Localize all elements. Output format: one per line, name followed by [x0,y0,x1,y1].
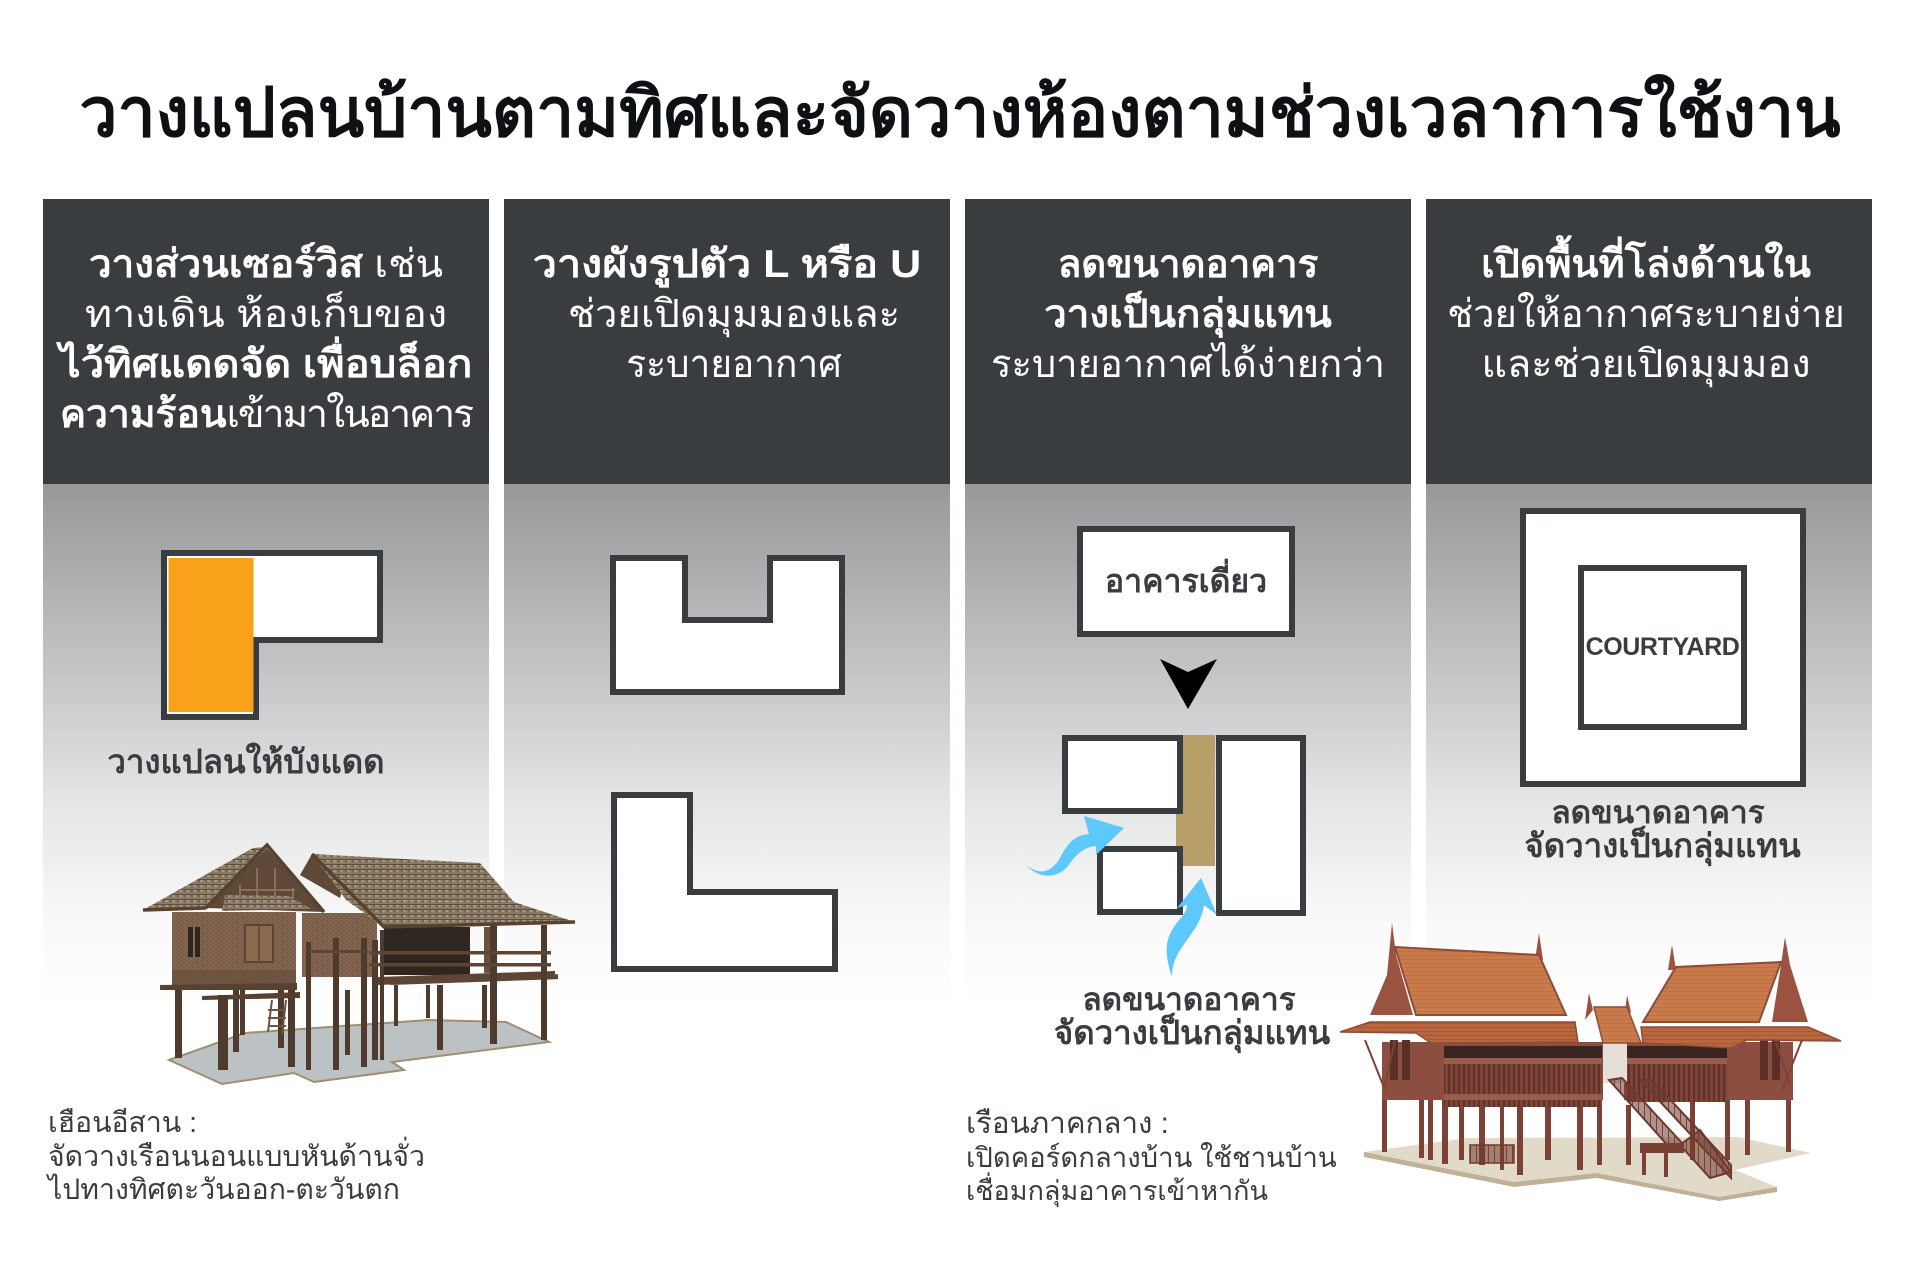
diagram: U-shaped plan [610,555,845,695]
diagram: clustered buildings [1026,735,1306,977]
diagram: courtyard plan [1520,508,1806,787]
panel background [504,484,950,1049]
heading: L or U plan: วางผังรูปตัว L หรือ U [533,243,921,286]
diagram: L-shaped plan [611,792,838,972]
note: Isan house [46,1107,425,1206]
panel: open inner courtyard [1426,199,1872,908]
heading: reduce building size: ลดขนาดอาคาร [1058,243,1318,286]
diagram: sun-shading plan [161,550,383,720]
heading: open inner courtyard: ช่วยให้อากาศระบายง่าย [1447,293,1845,336]
caption: courtyard [1524,794,1801,866]
title: วางแปลนบ้านตามทิศและจัดวางห้องตามช่วงเวลาการใช้งาน [79,75,1841,151]
note: central house: เรือนภาคกลาง : [966,1107,1169,1140]
caption: clustered buildings [1054,981,1330,1054]
panel: service zones [43,199,489,1206]
caption: shading plan: วางแปลนให้บังแดด [107,743,385,780]
note: central house [966,1107,1337,1208]
note: central house: เปิดคอร์ดกลางบ้าน ใช้ชานบ้าน [966,1142,1337,1172]
panel background [1426,484,1872,1049]
heading: reduce building size: วางเป็นกลุ่มแทน [1044,293,1332,336]
heading: reduce building size: ระบายอากาศได้ง่ายกว่า [991,343,1385,386]
caption: clustered buildings: ลดขนาดอาคาร [1082,981,1296,1017]
heading: open inner courtyard [1426,199,1872,484]
caption: clustered buildings: จัดวางเป็นกลุ่มแทน [1054,1014,1330,1051]
panel background [43,484,489,1049]
panel: L or U plan [504,199,950,972]
panel: reduce building size [965,199,1411,1208]
note: Isan house: ไปทางทิศตะวันออก-ตะวันตก [48,1174,400,1206]
heading: L or U plan: ระบายอากาศ [626,343,842,386]
note: central house: เชื่อมกลุ่มอาคารเข้าหากัน [966,1176,1268,1206]
note: Isan house: เฮือนอีสาน : [48,1107,197,1139]
heading: reduce building size [965,199,1411,484]
caption: courtyard: จัดวางเป็นกลุ่มแทน [1524,827,1801,864]
heading: L or U plan: ช่วยเปิดมุมมองและ [568,293,900,336]
illustration: Isan wooden house [142,842,576,1085]
heading: service zones: วางส่วนเซอร์วิส เช่น [89,243,443,286]
heading: service zones [43,199,489,484]
heading: open inner courtyard: เปิดพื้นที่โล่งด้านใน [1481,243,1811,286]
diagram: single building [1077,526,1295,637]
panel background [965,484,1411,1049]
heading: service zones: ความร้อนเข้ามาในอาคาร [60,393,472,436]
courtyard box [1578,565,1747,730]
arrow: down [1160,659,1217,709]
illustration: central Thai house [1340,923,1842,1201]
courtyard box: COURTYARD [1586,633,1739,661]
heading: open inner courtyard: และช่วยเปิดมุมมอง [1481,343,1811,386]
note: Isan house: จัดวางเรือนนอนแบบหันด้านจั่ว [48,1140,425,1172]
diagram: single building: อาคารเดี่ยว [1105,563,1267,599]
caption: courtyard: ลดขนาดอาคาร [1551,794,1765,830]
heading: L or U plan [504,199,950,484]
heading: service zones: ไว้ทิศแดดจัด เพื่อบล็อก [60,343,472,386]
heading: service zones: ทางเดิน ห้องเก็บของ [85,293,447,336]
